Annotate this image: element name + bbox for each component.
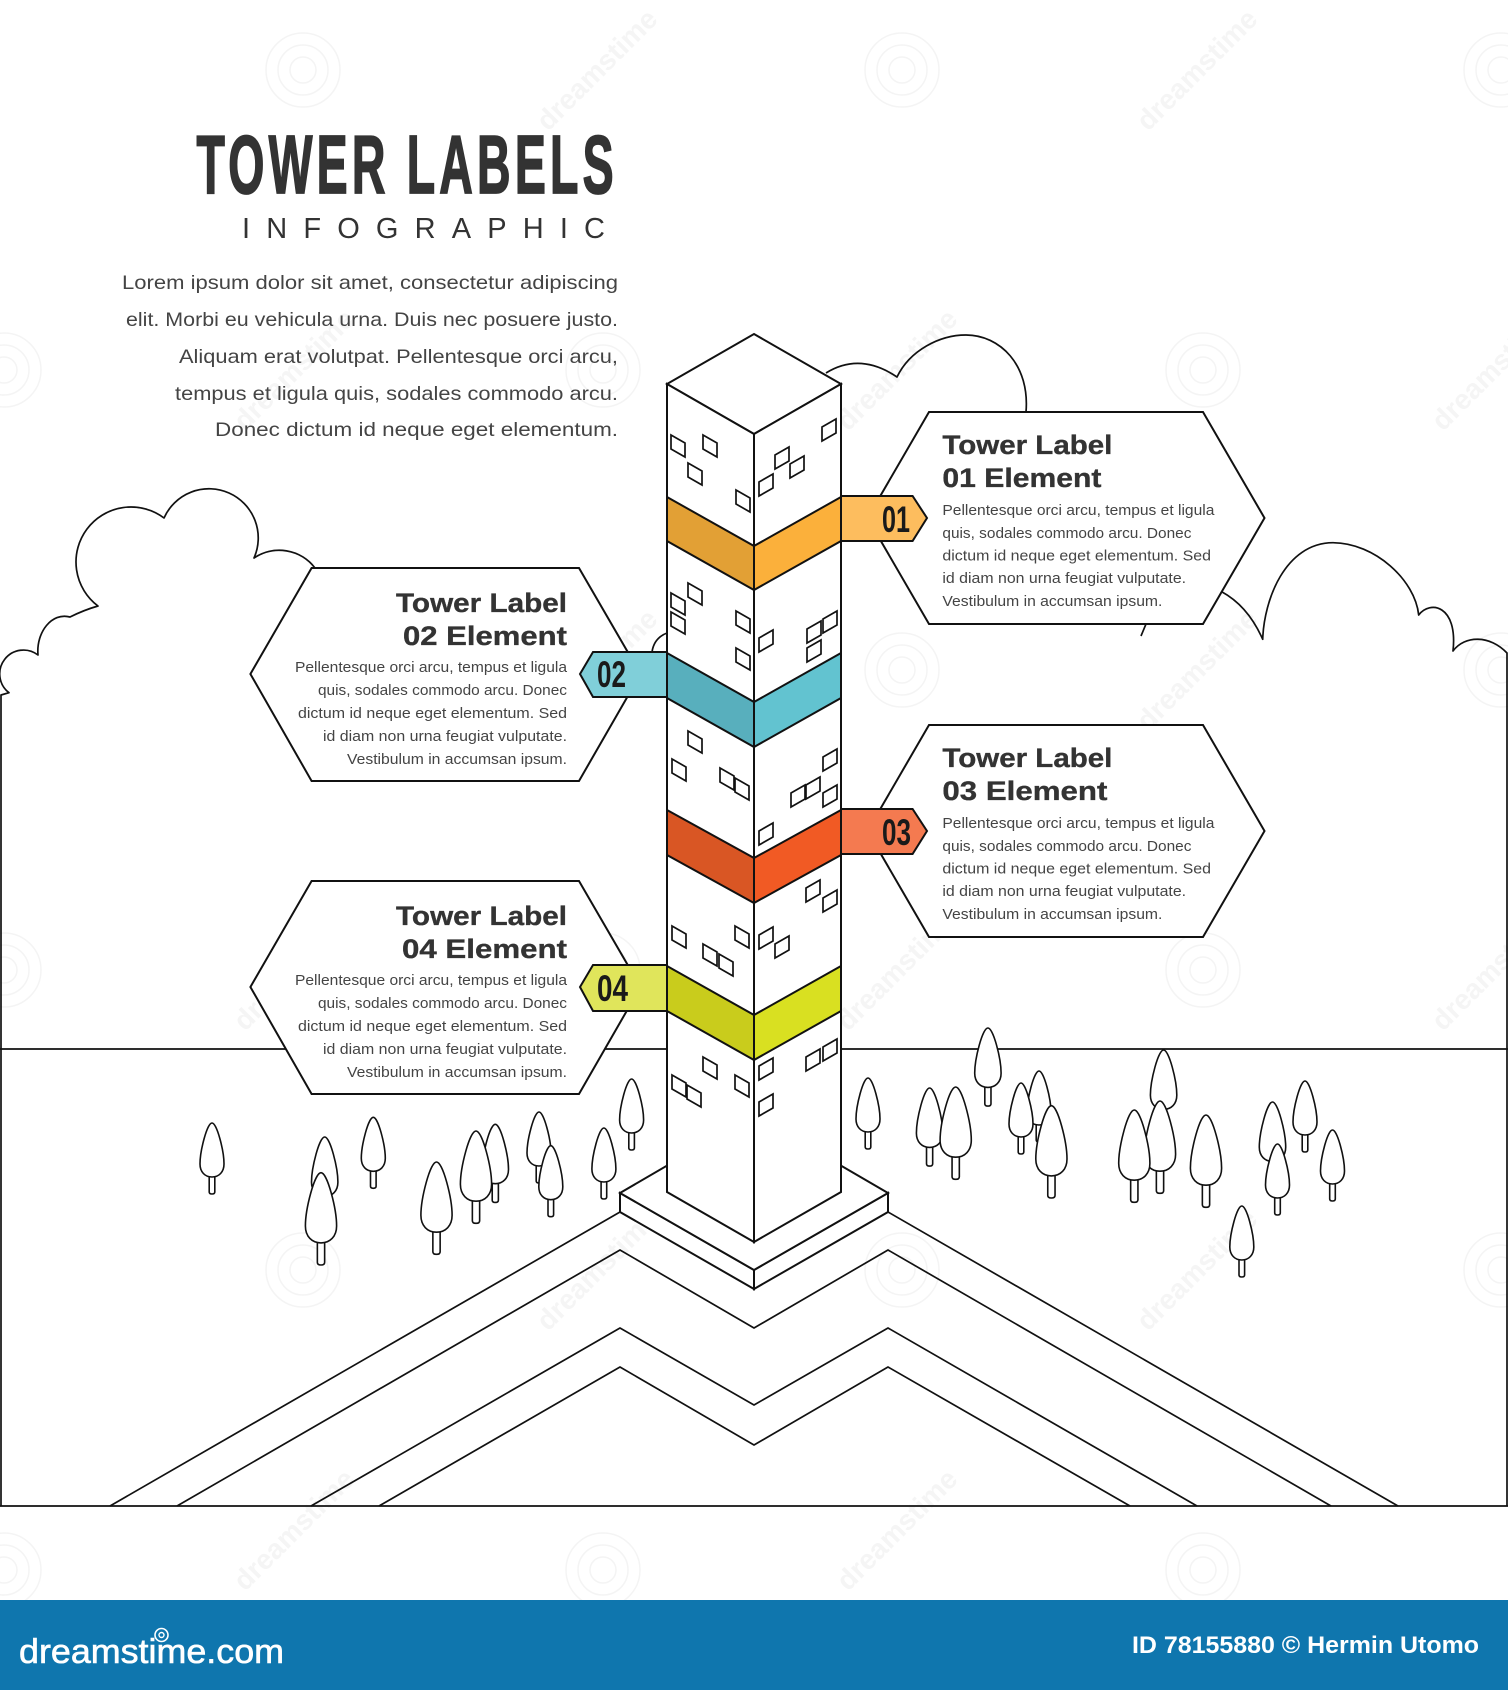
panel: label 04 bbox=[250, 881, 640, 1094]
infographic canvas: dreamstime bbox=[227, 903, 360, 1036]
cloud skyline outline bbox=[0, 335, 1507, 1506]
body 02: Vestibulum in accumsan ipsum. bbox=[347, 751, 567, 768]
trees left bbox=[200, 1079, 644, 1265]
body 02: quis, sodales commodo arcu. Donec bbox=[318, 682, 568, 699]
panel: label 03 bbox=[868, 725, 1264, 937]
body 04: dictum id neque eget elementum. Sed bbox=[298, 1018, 567, 1035]
heading 04 bbox=[396, 901, 567, 964]
body 04: Pellentesque orci arcu, tempus et ligula bbox=[295, 972, 568, 989]
intro paragraph: tempus et ligula quis, sodales commodo arcu. bbox=[175, 383, 618, 405]
title: TOWER LABELS bbox=[196, 119, 618, 212]
tower right face bbox=[754, 384, 841, 1242]
base platform bbox=[620, 1115, 888, 1289]
heading 03: Tower Label bbox=[942, 743, 1112, 773]
infographic canvas: dreamstime bbox=[830, 1463, 963, 1596]
body 03 bbox=[942, 815, 1215, 923]
body 02: id diam non urna feugiat vulputate. bbox=[323, 728, 567, 745]
infographic canvas: dreamstime bbox=[227, 1463, 360, 1596]
heading 03: 03 Element bbox=[942, 776, 1107, 806]
right cloud bbox=[1141, 543, 1507, 1506]
infographic canvas: dreamstime bbox=[1130, 3, 1263, 136]
trees right bbox=[856, 1028, 1344, 1277]
small cloud arc by tower bbox=[652, 633, 667, 652]
heading 01: Tower Label bbox=[942, 430, 1112, 460]
tower top bbox=[667, 334, 841, 434]
body 02 bbox=[295, 659, 568, 768]
heading 02: 02 Element bbox=[403, 621, 567, 651]
hexagon 03 bbox=[868, 725, 1264, 937]
band 03 red bbox=[667, 810, 841, 903]
tag 04: 04 bbox=[597, 968, 628, 1009]
body 04: id diam non urna feugiat vulputate. bbox=[323, 1041, 567, 1058]
horizon bbox=[0, 1048, 1508, 1050]
body 01: Vestibulum in accumsan ipsum. bbox=[942, 593, 1162, 610]
footer logo: dreamstime.com bbox=[19, 1633, 284, 1671]
infographic canvas: dreamstime bbox=[530, 1203, 663, 1336]
subtitle: INFOGRAPHIC bbox=[242, 213, 605, 245]
heading 04: 04 Element bbox=[402, 934, 567, 964]
tower left face bbox=[667, 384, 754, 1242]
body 02: Pellentesque orci arcu, tempus et ligula bbox=[295, 659, 568, 676]
body 02: dictum id neque eget elementum. Sed bbox=[298, 705, 567, 722]
band 02 teal bbox=[667, 653, 841, 747]
infographic canvas: dreamstime bbox=[1130, 603, 1263, 736]
infographic canvas: dreamstime bbox=[530, 603, 663, 736]
heading 02: Tower Label bbox=[396, 588, 567, 618]
body 01: Pellentesque orci arcu, tempus et ligula bbox=[942, 502, 1215, 519]
intro paragraph bbox=[122, 272, 618, 441]
infographic canvas: dreamstime bbox=[227, 303, 360, 436]
tag 03 bbox=[841, 809, 927, 854]
intro paragraph: Aliquam erat volutpat. Pellentesque orci arcu, bbox=[179, 346, 618, 368]
hexagon 01 bbox=[868, 412, 1264, 624]
infographic canvas: dreamstime bbox=[530, 3, 663, 136]
band 01 orange bbox=[667, 497, 841, 590]
tag 02: 02 bbox=[597, 654, 626, 695]
road second bbox=[177, 1250, 1331, 1506]
body 01: id diam non urna feugiat vulputate. bbox=[942, 570, 1186, 587]
heading 04: Tower Label bbox=[396, 901, 567, 931]
tag 02 bbox=[580, 652, 667, 697]
tag 01: 01 bbox=[882, 499, 910, 540]
cloud behind tower top bbox=[826, 335, 1026, 412]
band 04 lime bbox=[667, 966, 841, 1060]
ground lines bbox=[0, 1049, 1508, 1506]
body 04 bbox=[295, 972, 568, 1081]
tag 01 bbox=[841, 496, 927, 541]
body 01: dictum id neque eget elementum. Sed bbox=[942, 548, 1211, 564]
heading 01: 01 Element bbox=[942, 463, 1101, 493]
body 03: Pellentesque orci arcu, tempus et ligula bbox=[942, 815, 1215, 832]
intro paragraph: elit. Morbi eu vehicula urna. Duis nec posuere justo. bbox=[126, 309, 618, 331]
body 01 bbox=[942, 502, 1215, 610]
footer credit: ID 78155880 © Hermin Utomo bbox=[1132, 1632, 1479, 1659]
road outer bbox=[110, 1212, 1398, 1506]
intro paragraph: Lorem ipsum dolor sit amet, consectetur adipiscing bbox=[122, 272, 618, 294]
hexagon 02 bbox=[250, 568, 640, 781]
left cloud bbox=[0, 489, 315, 1506]
infographic canvas: dreamstime bbox=[830, 303, 963, 436]
heading 03 bbox=[942, 743, 1112, 806]
body 03: quis, sodales commodo arcu. Donec bbox=[942, 838, 1192, 855]
title block bbox=[122, 119, 618, 441]
infographic canvas: dreamstime bbox=[1130, 1203, 1263, 1336]
road fourth bbox=[379, 1367, 1130, 1506]
body 04: Vestibulum in accumsan ipsum. bbox=[347, 1064, 567, 1081]
infographic canvas: dreamstime bbox=[830, 903, 963, 1036]
bottom line bbox=[0, 1505, 1508, 1507]
tower bbox=[667, 334, 841, 1242]
body 01: quis, sodales commodo arcu. Donec bbox=[942, 525, 1192, 542]
heading 01 bbox=[942, 430, 1112, 493]
heading 02 bbox=[396, 588, 567, 651]
body 04: quis, sodales commodo arcu. Donec bbox=[318, 995, 568, 1012]
body 03: dictum id neque eget elementum. Sed bbox=[942, 860, 1211, 878]
tag 04 bbox=[580, 965, 667, 1011]
panel: label 02 bbox=[250, 568, 640, 781]
road third bbox=[311, 1328, 1197, 1506]
hexagon 04 bbox=[250, 881, 640, 1094]
footer bar bbox=[0, 1600, 1508, 1690]
intro paragraph: Donec dictum id neque eget elementum. bbox=[215, 419, 618, 441]
right face windows bbox=[759, 419, 837, 1116]
body 03: id diam non urna feugiat vulputate. bbox=[942, 883, 1186, 900]
left face windows bbox=[671, 435, 750, 1107]
body 03: Vestibulum in accumsan ipsum. bbox=[942, 906, 1162, 923]
panel: label 01 bbox=[868, 412, 1264, 624]
tag 03: 03 bbox=[882, 812, 911, 853]
